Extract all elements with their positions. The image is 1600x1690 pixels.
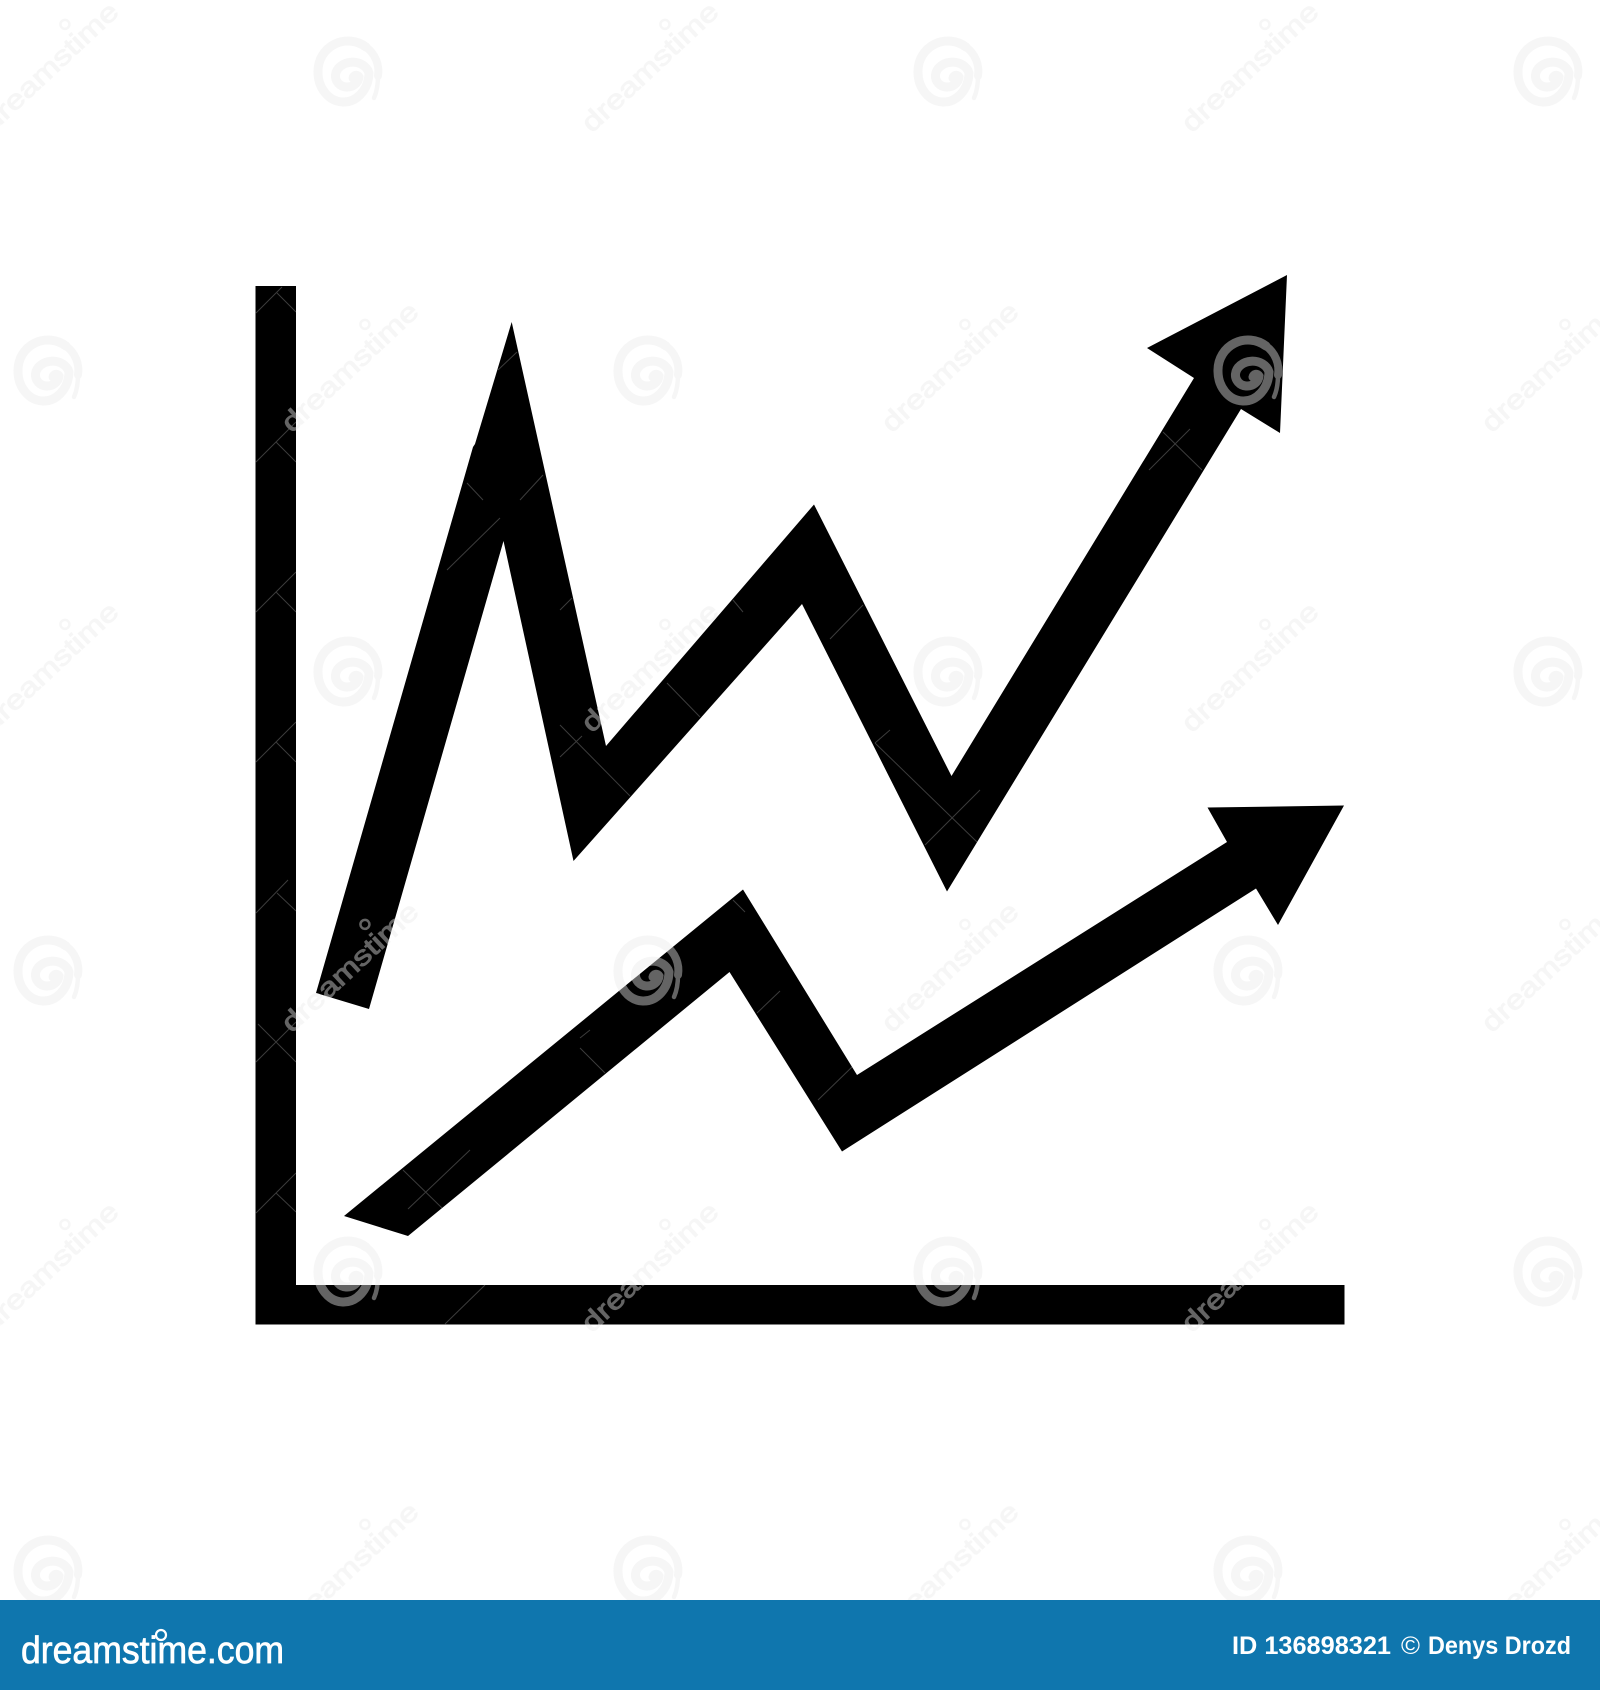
watermark grid lines <box>256 287 1202 1324</box>
upper zigzag arrow <box>316 275 1287 1009</box>
footer credit: ID 136898321 <box>1232 1632 1391 1660</box>
watermark text: dreamstime <box>575 1196 725 1338</box>
watermark text: dreamstime <box>275 1496 425 1638</box>
watermark text: dreamstime <box>875 896 1025 1038</box>
watermark text: dreamstime <box>1475 896 1600 1038</box>
watermark text: dreamstime <box>1475 1496 1600 1638</box>
footer bar <box>0 1600 1600 1690</box>
watermark text: dreamstime <box>575 0 725 138</box>
watermark text: dreamstime <box>575 596 725 738</box>
watermark text: dreamstime <box>1175 0 1325 138</box>
footer credit: © <box>1401 1632 1421 1660</box>
watermark text: dreamstime <box>275 296 425 438</box>
footer credit: Denys Drozd <box>1428 1632 1571 1660</box>
lower zigzag arrow <box>344 806 1344 1236</box>
chart axes <box>256 286 1344 1324</box>
watermark text: dreamstime <box>1175 596 1325 738</box>
chart icon <box>256 275 1344 1324</box>
footer logo: dreamstime.com <box>21 1630 284 1672</box>
watermark text: dreamstime <box>875 296 1025 438</box>
footer credit <box>1232 1632 1571 1660</box>
watermark text: dreamstime <box>1175 1196 1325 1338</box>
watermark text: dreamstime <box>1475 296 1600 438</box>
watermark text: dreamstime <box>275 896 425 1038</box>
watermark text: dreamstime <box>875 1496 1025 1638</box>
